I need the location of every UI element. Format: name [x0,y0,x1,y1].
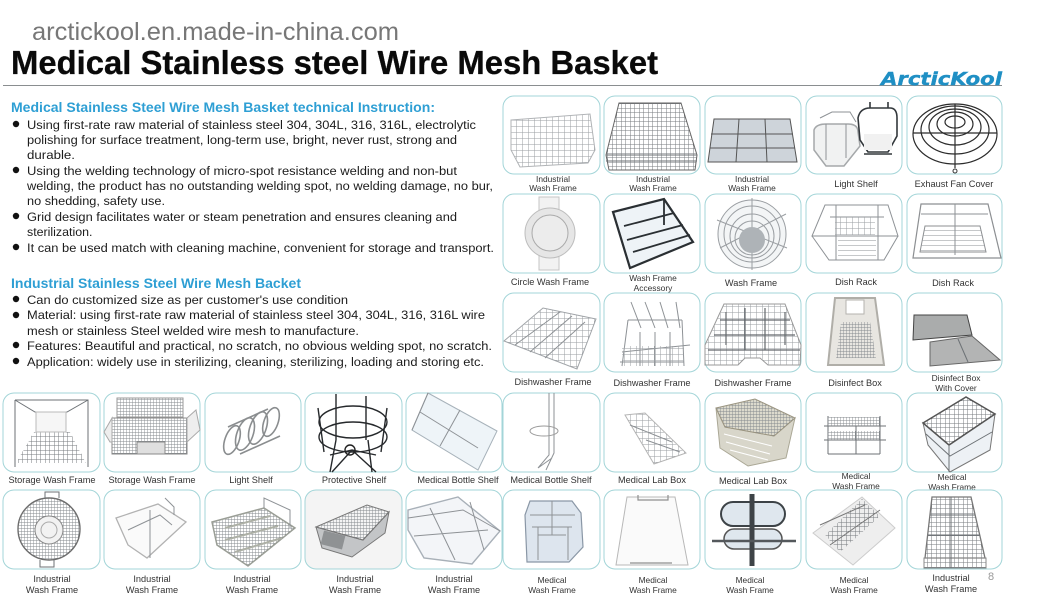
card: Wash Frame [705,194,801,288]
card: Dish Rack 1 [806,194,902,287]
card: Industrial Wash Frame 3 [705,96,801,193]
card: Medical Bottle Shelf 2: Medical Bottle Shelf [510,475,592,485]
bullet list: technical instruction: It can be used match with cleaning machine, convenient for storage and transport. [27,241,494,255]
bullet list: technical instruction: Grid design facilitates water or steam penetration and ensures cleaning and [27,210,457,224]
bullet list: technical instruction: no shedding, safety use. [27,194,165,208]
card: Medical Wash Frame 6: Wash Frame [830,585,878,595]
bullet list: technical instruction: polishing for surface treatment, long-term use, bright, never rust, strong and [27,133,457,147]
divider and brand logo: ArcticKool [879,69,1003,90]
card: Medical Wash Frame 4: Wash Frame [629,585,677,595]
card: Industrial Wash Frame round: Wash Frame [26,585,78,595]
card: Industrial Wash Frame 9: Industrial [932,573,970,583]
card: Medical Wash Frame 5 [705,490,801,595]
card: Industrial Wash Frame 6: Industrial [233,574,271,584]
card: Circle Wash Frame: Circle Wash Frame [511,277,589,287]
card: Protective Shelf: Protective Shelf [322,475,387,485]
card: Industrial Wash Frame 2: Industrial [636,174,670,184]
bullet list: industrial basket: Material: using first-rate raw material of stainless steel 304, 304L, 316, 316L wire [27,308,485,322]
card: Medical Lab Box 1: Medical Lab Box [618,475,686,485]
card: Dishwasher Frame 1 [503,293,600,387]
card: Wash Frame: Wash Frame [725,278,777,288]
bullet list: technical instruction [13,118,494,255]
card: Medical Wash Frame 1: Wash Frame [832,481,880,491]
card: Wash Frame Accessory: Accessory [634,283,673,293]
card: Light Shelf 2: Light Shelf [229,475,273,485]
card: Circle Wash Frame [503,194,600,287]
card: Medical Wash Frame 4 [604,490,700,595]
card: Medical Wash Frame 6 [806,490,902,595]
card: Medical Wash Frame 1: Medical [842,471,871,481]
bullet list: technical instruction: Using first-rate raw material of stainless steel 304, 304L, 316, 316L, electrolytic [27,118,476,132]
card: Industrial Wash Frame 2: Wash Frame [629,183,677,193]
card: Dishwasher Frame 3: Dishwasher Frame [714,378,792,388]
bullet list: technical instruction: sterilization. [27,225,92,239]
bullet list: industrial basket: Can do customized size as per customer's use condition [27,293,348,307]
card: Medical Bottle Shelf 1 [406,393,502,485]
card: Industrial Wash Frame 9 [907,490,1002,594]
card: Industrial Wash Frame 5 [104,490,200,595]
card: Medical Wash Frame 5: Medical [736,575,765,585]
panel: industrial basket [11,276,492,369]
card: Disinfect Box With Cover [907,293,1002,393]
card: Medical Bottle Shelf 1: Medical Bottle Shelf [417,475,499,485]
card: Medical Bottle Shelf 2 [503,393,600,485]
card: Industrial Wash Frame 1: Industrial [536,174,570,184]
card: Industrial Wash Frame 1: Wash Frame [529,183,577,193]
card: Medical Wash Frame 2: Medical [938,472,967,482]
heading: industrial basket: Industrial Stainless Steel Wire Mesh Backet [11,276,302,291]
bullet list: industrial basket: Application: widely use in sterilizing, cleaning, sterilizing, loading and storing etc. [27,355,484,369]
card: Industrial Wash Frame round [3,490,100,595]
card: Dishwasher Frame 1: Dishwasher Frame [514,377,592,387]
card: Protective Shelf [305,393,402,485]
panel: technical instruction [11,100,494,255]
card: Wash Frame Accessory: Wash Frame [629,273,677,283]
card: Industrial Wash Frame 3: Wash Frame [728,183,776,193]
card: Industrial Wash Frame 3: Industrial [735,174,769,184]
card: Storage Wash Frame 1: Storage Wash Frame [9,475,95,485]
bullet list: industrial basket: Features: Beautiful and practical, no scratch, no obvious welding spot, no scratch. [27,339,492,353]
card: Storage Wash Frame 1 [3,393,100,485]
card: Industrial Wash Frame 8: Wash Frame [428,585,480,595]
card: Medical Wash Frame 3: Wash Frame [528,585,576,595]
card: Storage Wash Frame 2 [104,393,200,485]
watermark: arctickool.en.made-in-china.com [32,18,399,46]
bullet list: industrial basket: mesh or stainless Steel welded wire mesh to manufacture. [27,324,359,338]
card: Light Shelf 2 [205,393,301,485]
card: Industrial Wash Frame 9: Wash Frame [925,584,977,594]
heading: technical instruction: Medical Stainless Steel Wire Mesh Basket technical Instruction: [11,100,435,115]
bullet list: technical instruction: welding, the product has no outstanding welding spot, no welding damage, no bur, [26,179,493,193]
card: Industrial Wash Frame 8: Industrial [435,574,473,584]
card: Dishwasher Frame 2: Dishwasher Frame [613,378,691,388]
card: Medical Wash Frame 2 [907,393,1002,492]
card: Industrial Wash Frame 8 [406,490,502,595]
bullet list: industrial basket [13,293,492,369]
card: Medical Wash Frame 6: Medical [840,575,869,585]
card: Industrial Wash Frame 2 [604,96,700,193]
card: Exhaust Fan Cover: Exhaust Fan Cover [915,179,993,189]
card: Industrial Wash Frame 7: Wash Frame [329,585,381,595]
card: Light Shelf 1 [806,96,902,189]
card: Industrial Wash Frame 7 [305,490,402,595]
card: Industrial Wash Frame 6: Wash Frame [226,585,278,595]
card: Light Shelf 1: Light Shelf [834,179,878,189]
card: Industrial Wash Frame 5: Industrial [133,574,171,584]
card: Industrial Wash Frame round: Industrial [33,574,71,584]
card: Medical Wash Frame 3 [503,490,600,595]
card: Dish Rack 2 [907,194,1002,288]
card: Industrial Wash Frame 7: Industrial [336,574,374,584]
card: Exhaust Fan Cover [907,96,1002,189]
card: Industrial Wash Frame 5: Wash Frame [126,585,178,595]
title: Medical Stainless steel Wire Mesh Basket [11,44,658,81]
bullet list: technical instruction: durable. [27,148,75,162]
card: Medical Lab Box 2 [705,393,801,486]
card: Storage Wash Frame 2: Storage Wash Frame [109,475,195,485]
bullet list: technical instruction: Using the welding technology of micro-spot resistance welding and non-but [27,164,458,178]
card: Industrial Wash Frame 1 [503,96,600,193]
page number: 8 [988,571,994,583]
card: Disinfect Box: Disinfect Box [828,378,882,388]
card: Medical Wash Frame 1 [806,393,902,491]
card: Medical Wash Frame 5: Wash Frame [726,585,774,595]
card: Disinfect Box [806,293,902,388]
card: Dish Rack 2: Dish Rack [932,278,974,288]
card: Medical Wash Frame 2: Wash Frame [928,482,976,492]
card: Medical Wash Frame 4: Medical [639,575,668,585]
card: Medical Lab Box 2: Medical Lab Box [719,476,787,486]
card: Industrial Wash Frame 6 [205,490,301,595]
card: Wash Frame Accessory [604,194,700,293]
card: Disinfect Box With Cover: Disinfect Box [932,373,981,383]
card: Dishwasher Frame 3 [705,293,801,388]
card: Disinfect Box With Cover: With Cover [935,383,977,393]
card: Dishwasher Frame 2 [604,293,700,388]
card: Medical Wash Frame 3: Medical [538,575,567,585]
card: Medical Lab Box 1 [604,393,700,485]
card: Dish Rack 1: Dish Rack [835,277,877,287]
